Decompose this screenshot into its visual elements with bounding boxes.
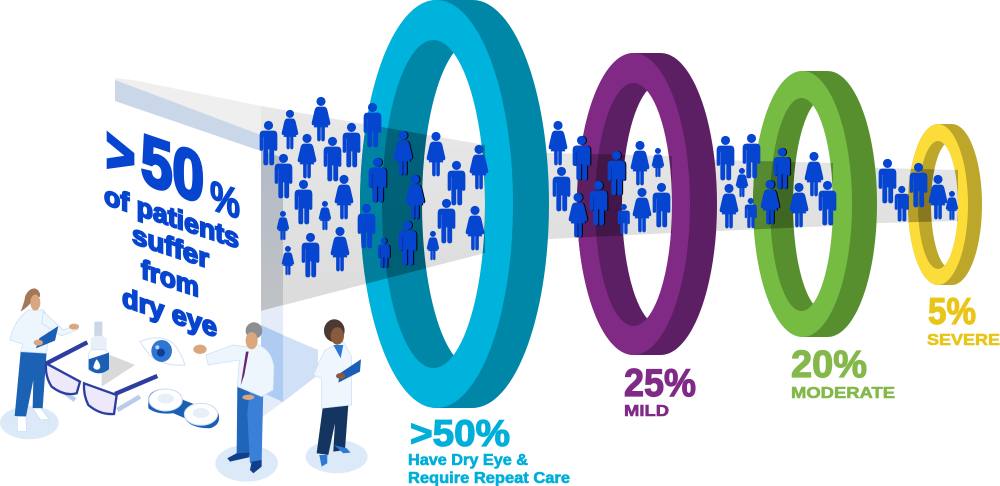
icon: eye drops bottle bbox=[89, 322, 135, 387]
headline: over 50% of patients suffer from dry eye: dry eye bbox=[122, 282, 217, 343]
label: over 50% bbox=[408, 413, 570, 486]
ring: moderate 20% bbox=[714, 71, 877, 337]
label: 5% severe: 5% bbox=[928, 291, 976, 332]
ring: dry eye over 50% bbox=[261, 0, 549, 408]
headline: over 50% of patients suffer from dry eye: 50 bbox=[141, 120, 204, 219]
label: 25% mild: 25% bbox=[624, 362, 696, 405]
label: 20% moderate: MODERATE bbox=[791, 385, 895, 402]
crowd of patients: second segment bbox=[549, 121, 670, 237]
woman clinician with tablet bbox=[0, 288, 79, 439]
ring: mild 25% bbox=[546, 53, 717, 355]
label: over 50%: Have Dry Eye & bbox=[408, 452, 528, 469]
headline: over 50% of patients suffer from dry eye: % bbox=[210, 172, 240, 229]
headline: over 50% of patients suffer from dry eye bbox=[104, 114, 240, 343]
crowd of patients: fourth segment bbox=[879, 159, 958, 221]
headline: over 50% of patients suffer from dry eye: suffer bbox=[132, 219, 209, 274]
label: 20% moderate bbox=[791, 344, 895, 402]
ring: severe 5% bbox=[875, 124, 982, 285]
label: 20% moderate: 20% bbox=[791, 344, 867, 386]
headline: over 50% of patients suffer from dry eye: > bbox=[106, 114, 135, 193]
icon: contact lens case bbox=[148, 389, 219, 428]
female doctor in white coat bbox=[306, 319, 368, 473]
funnel top wall bbox=[115, 78, 261, 151]
headline: over 50% of patients suffer from dry eye: from bbox=[141, 254, 199, 303]
label: 25% mild bbox=[624, 362, 696, 420]
label: 5% severe bbox=[927, 291, 1000, 349]
funnel side strip and floor bbox=[261, 150, 318, 418]
label: 25% mild: MILD bbox=[624, 403, 669, 420]
icon: glasses bbox=[46, 342, 157, 414]
male doctor presenting bbox=[193, 322, 278, 482]
label: over 50%: >50% bbox=[410, 413, 510, 454]
label: 5% severe: SEVERE bbox=[927, 332, 1000, 349]
headline: over 50% of patients suffer from dry eye: of patients bbox=[104, 180, 239, 254]
crowd of patients: third segment bbox=[717, 134, 836, 228]
crowd of patients: first segment bbox=[260, 97, 488, 277]
icon: eye bbox=[140, 338, 185, 365]
